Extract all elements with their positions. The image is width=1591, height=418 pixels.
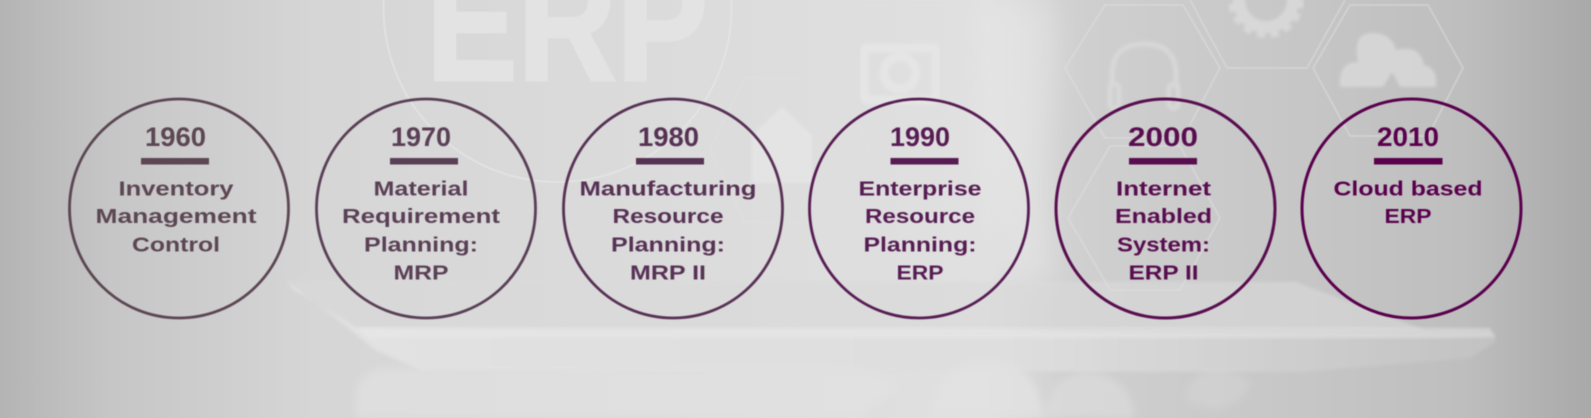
label: System: [1117,234,1210,257]
underline [1129,158,1197,164]
lower hexagon [1068,146,1220,290]
underline [890,158,958,164]
label: Material [374,178,468,201]
label: Requirement [342,205,500,228]
icon: gear [1231,0,1301,35]
label: Planning: [364,234,478,257]
label: Management [96,205,257,228]
fingers [1027,378,1130,414]
ring [1302,99,1521,318]
milestone: 1970 [316,99,536,318]
label: Enabled [1115,205,1212,228]
label [1334,178,1482,228]
icon: headset [1110,44,1178,108]
year: 1970 [391,122,451,152]
background: hexagon icon network [710,0,1463,290]
milestone: 2010 [1302,99,1521,318]
tablet body [344,322,1492,370]
label: Cloud based [1334,178,1482,201]
ring [1056,99,1275,318]
home hexagon [710,78,870,222]
label: ERP II [1128,262,1198,285]
milestone: 1980 [564,99,782,318]
cloud hexagon [1313,5,1463,136]
milestone: 1960 [70,99,288,318]
ring [564,99,782,318]
label: Enterprise [858,178,982,201]
milestone: 2000 [1056,99,1275,318]
year: 2010 [1377,122,1439,152]
ring [316,99,536,318]
background: ERP watermark [383,0,648,182]
year: 1990 [890,122,950,152]
icon: camera [864,48,936,100]
label [858,178,982,285]
year: 1980 [638,122,699,152]
camera hexagon [827,5,978,136]
background: blurred hand and tablet photograph [287,0,1495,418]
label [580,178,756,285]
label: Internet [1116,178,1211,201]
label: Inventory [118,178,234,201]
underline [390,158,458,164]
label: Planning: [611,234,725,257]
year: 1960 [145,122,206,152]
label: MRP II [630,262,706,285]
year: 2000 [1128,122,1198,152]
ring [70,99,288,318]
label: ERP [1384,205,1432,228]
label: ERP [896,262,944,285]
label: MRP [394,262,448,285]
label: Planning: [864,234,976,257]
tablet front edge highlight [1040,328,1494,338]
tablet screen [1138,283,1416,328]
underline [636,158,704,164]
icon: cloud with arrow [1340,33,1436,87]
large circle outline [383,0,634,182]
underline [141,158,209,164]
gear hexagon [1190,0,1345,68]
ring [810,99,1028,318]
headset hexagon [1065,5,1220,138]
icon: home [752,107,812,183]
label: Resource [865,205,975,228]
label: Control [132,234,220,257]
underline [1374,158,1442,164]
label [1115,178,1212,285]
bright hand glow [1017,18,1044,254]
milestone: 1990 [810,99,1028,318]
label: Manufacturing [580,178,756,201]
label [96,178,257,257]
label [342,178,500,285]
label: Resource [612,205,724,228]
